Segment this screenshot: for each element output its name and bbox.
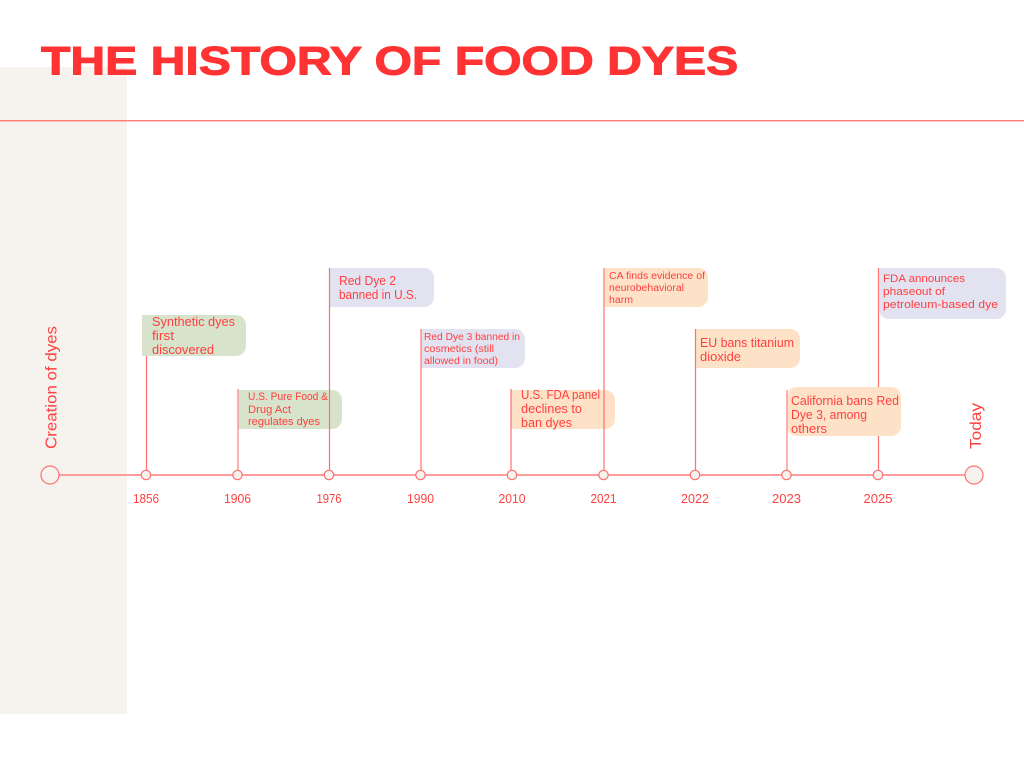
end label: today: Today [968,403,985,449]
event: 1906 pure food act: regulates dyes [248,416,320,428]
event: 1906 pure food act: U.S. Pure Food & [248,391,329,403]
year labels: 1990 [407,492,434,506]
event: 2010 FDA panel: U.S. FDA panel [521,388,600,402]
event: 2022 EU titanium dioxide: EU bans titanium [700,336,794,350]
event: 1856 synthetic dyes [142,315,246,470]
year labels: 1906 [224,492,251,506]
event: 2025 FDA phaseout: petroleum-based dye [883,299,998,311]
event: 1990 red dye 3 cosmetics: allowed in food) [424,356,498,367]
event: 1976 red dye 2 [329,268,434,470]
year labels: 2021 [590,492,617,506]
year labels [133,492,893,506]
event: 2021 CA evidence: harm [609,295,633,306]
event: 1990 red dye 3 cosmetics [421,329,525,470]
event: 1990 red dye 3 cosmetics: Red Dye 3 banned in [424,332,520,343]
panel: beige sidebar [0,67,127,714]
event: 2022 EU titanium dioxide: dioxide [700,350,741,364]
event: 1990 red dye 3 cosmetics: cosmetics (still [424,344,494,355]
title: THE HISTORY OF FOOD DYES [41,39,738,84]
event: 2023 California ban: California bans Red [791,394,899,408]
event: 2021 CA evidence [604,268,708,470]
event: 1856 synthetic dyes: Synthetic dyes [152,315,235,329]
event: 2010 FDA panel: declines to [521,402,582,416]
year labels: 1976 [316,492,342,506]
start label: creation of dyes: Creation of dyes [44,326,60,449]
event: 2023 California ban: Dye 3, among [791,408,867,422]
event: 1976 red dye 2: banned in U.S. [339,288,417,302]
timeline axis [50,474,974,476]
event: 2025 FDA phaseout: FDA announces [883,273,966,285]
event: 2021 CA evidence: CA finds evidence of [609,271,705,282]
event: 2025 FDA phaseout [879,268,1006,319]
event: 2022 EU titanium dioxide [695,329,800,470]
event: 1856 synthetic dyes: first [152,329,175,343]
event: 2010 FDA panel [511,388,615,470]
event: 1856 synthetic dyes: discovered [152,343,214,357]
year labels: 2010 [498,492,526,506]
event: 2023 California ban [787,387,901,470]
event: 2010 FDA panel: ban dyes [521,416,572,430]
event: 2025 FDA phaseout stem [878,268,880,470]
year labels: 2022 [681,492,709,506]
year labels: 2025 [864,492,893,506]
event: 2023 California ban: others [791,422,827,436]
event: 2021 CA evidence: neurobehavioral [609,283,684,294]
event: 1906 pure food act: Drug Act [248,404,291,416]
event: 2025 FDA phaseout: phaseout of [883,286,946,298]
year labels: 2023 [772,492,801,506]
year labels: 1856 [133,492,159,506]
event: 1976 red dye 2: Red Dye 2 [339,274,396,288]
axis markers [41,466,983,484]
event: 1906 pure food act [238,389,342,470]
